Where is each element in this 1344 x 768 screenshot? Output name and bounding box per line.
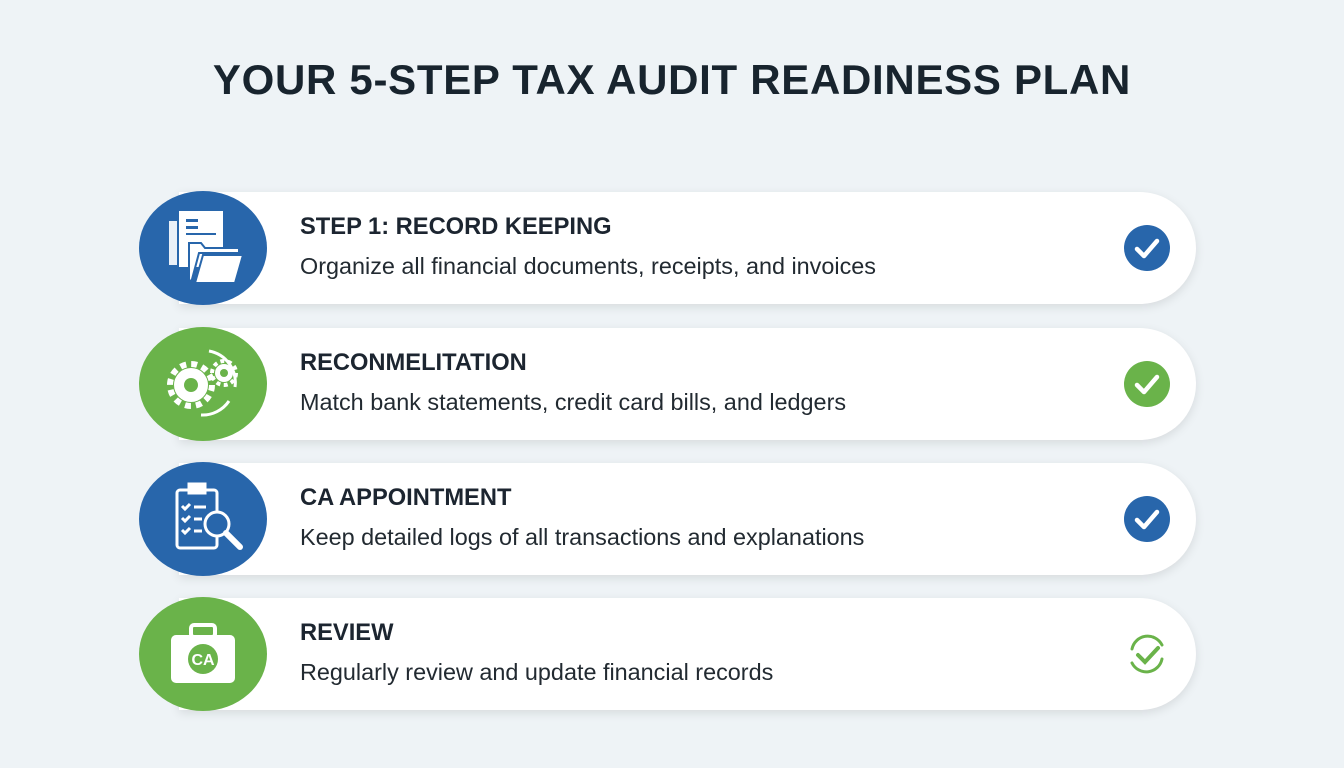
heading: CA APPOINTMENT: [300, 485, 511, 511]
description: Keep detailed logs of all transactions and explanations: [300, 524, 864, 550]
icon: gears: [139, 327, 267, 441]
icon: clipboard magnifier: [139, 462, 267, 576]
heading: STEP 1: RECORD KEEPING: [300, 214, 612, 240]
icon: CA briefcase: CA: [191, 652, 215, 669]
icon: refresh check: [1130, 634, 1164, 674]
row 3: CA appointment: [139, 462, 1198, 580]
icon: check: [1124, 361, 1170, 407]
row 4: review: [139, 597, 1198, 715]
icon: CA briefcase: [139, 597, 267, 711]
description: Organize all financial documents, receipts, and invoices: [300, 253, 876, 279]
title: YOUR 5-STEP TAX AUDIT READINESS PLAN: [213, 56, 1131, 103]
icon: check: [1124, 496, 1170, 542]
description: Regularly review and update financial records: [300, 659, 773, 685]
heading: REVIEW: [300, 620, 393, 646]
heading: RECONMELITATION: [300, 350, 527, 376]
icon: documents folder: [139, 191, 267, 305]
icon: check: [1124, 225, 1170, 271]
row 1: record keeping: [139, 191, 1198, 309]
description: Match bank statements, credit card bills, and ledgers: [300, 389, 846, 415]
row 2: reconciliation: [139, 327, 1198, 445]
